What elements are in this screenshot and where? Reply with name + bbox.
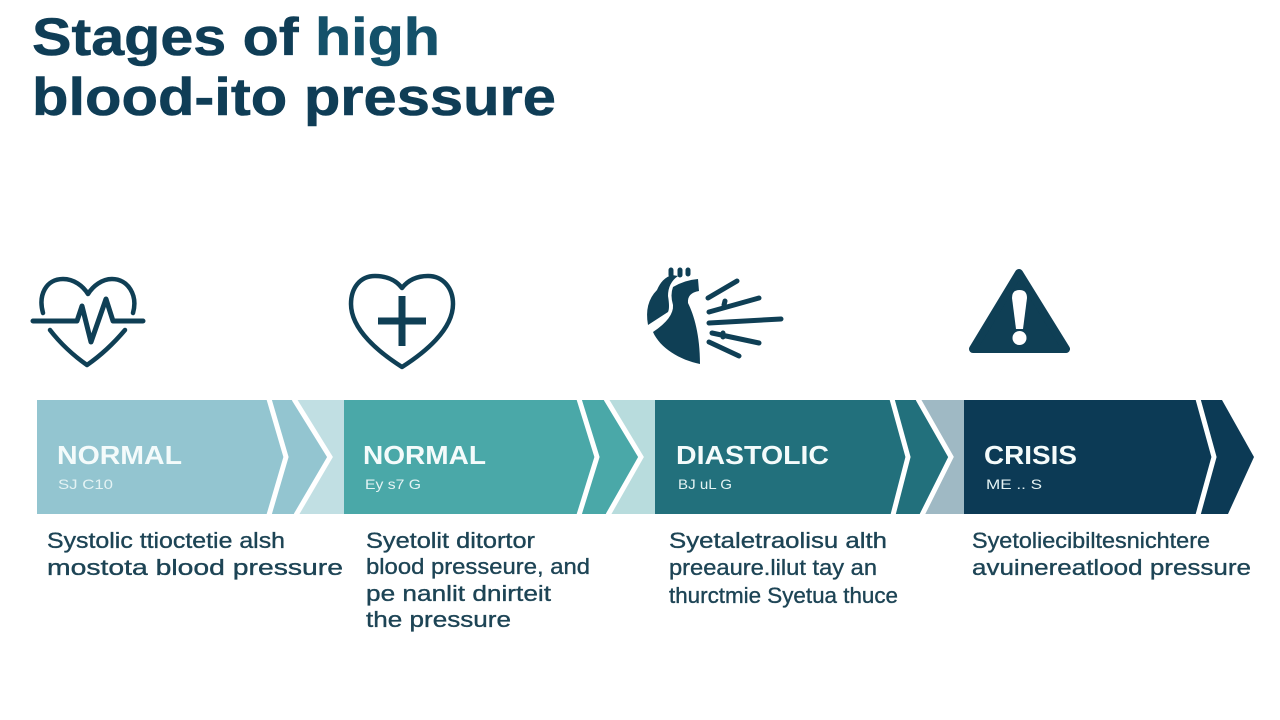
- text block: stage 2 description: pe nanlit dnirteit: [366, 581, 551, 606]
- panel: stage 1 normal: SJ C10: [58, 476, 113, 492]
- panel: stage 4 crisis: [964, 399, 1254, 515]
- text block: stage 4 description: [972, 528, 1251, 580]
- text block: stage 2 description: Syetolit ditortor: [366, 528, 535, 553]
- icon: warning triangle: [973, 273, 1066, 349]
- panel: stage 1 normal: NORMAL: [57, 440, 182, 470]
- icon: anatomical heart with rays: [647, 270, 781, 364]
- panel: stage 1 normal: [37, 399, 344, 515]
- text block: stage 4 description: avuinereatlood pressure: [972, 555, 1251, 580]
- title: [32, 8, 556, 127]
- icon: heart with pulse line: [33, 279, 143, 365]
- text block: stage 1 description: [47, 528, 343, 580]
- text block: stage 3 description: preeaure.lilut tay an: [669, 555, 877, 580]
- panel: stage 2 normal: [344, 399, 655, 515]
- text block: stage 4 description: Syetoliecibiltesnichtere: [972, 528, 1210, 553]
- text block: stage 3 description: [669, 528, 898, 608]
- text block: stage 2 description: [366, 528, 590, 632]
- text block: stage 2 description: blood presseure, and: [366, 554, 590, 579]
- panel: stage 3 diastolic: BJ uL G: [678, 476, 732, 492]
- text block: stage 1 description: mostota blood pressure: [47, 555, 343, 580]
- text block: stage 3 description: thurctmie Syetua thuce: [669, 583, 898, 608]
- panel: stage 4 crisis: ME .. S: [986, 476, 1042, 492]
- text block: stage 2 description: the pressure: [366, 607, 511, 632]
- panel: stage 4 crisis: CRISIS: [984, 440, 1077, 470]
- panel: stage 2 normal: Ey s7 G: [365, 476, 421, 492]
- panel: stage 2 normal: NORMAL: [363, 440, 486, 470]
- text block: stage 3 description: Syetaletraolisu alth: [669, 528, 887, 553]
- icon: heart with plus: [351, 276, 453, 367]
- panel: stage 3 diastolic: [655, 399, 964, 515]
- title: blood-ito pressure: [32, 68, 556, 127]
- text block: stage 1 description: Systolic ttioctetie alsh: [47, 528, 285, 553]
- panel: stage 3 diastolic: DIASTOLIC: [676, 440, 829, 470]
- title: Stages of high: [32, 8, 440, 67]
